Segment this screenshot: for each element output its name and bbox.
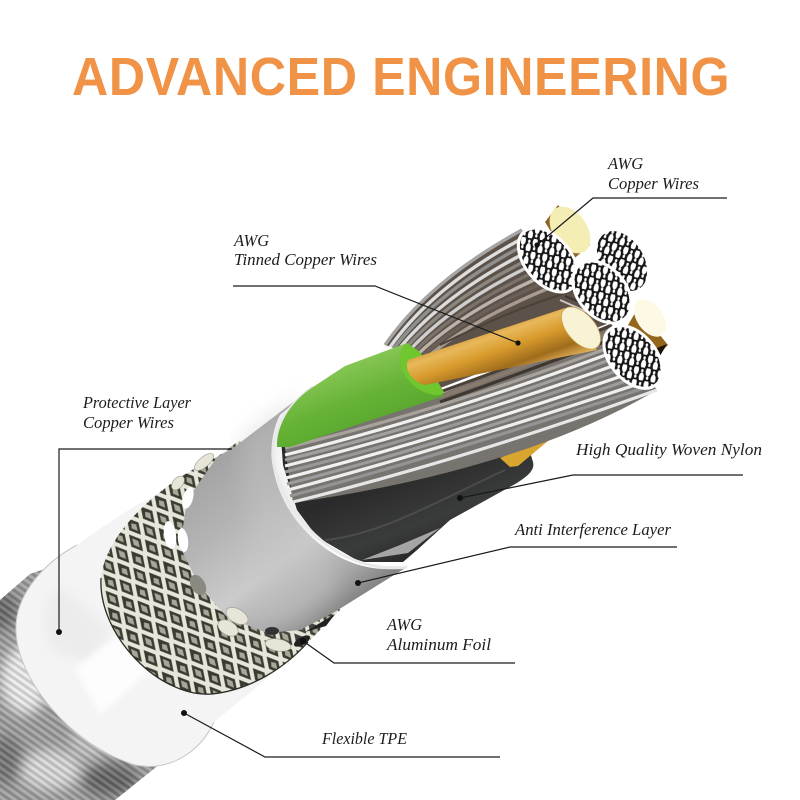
green insulation [277,343,444,447]
callout: flexible TPE [181,710,500,757]
strand end caps [507,217,674,399]
silver anti-interference tube [180,387,407,633]
upper strand bundle [385,230,618,392]
gold wire behind dark layer [500,437,548,467]
callout: AWG copper wires: Copper Wires [608,174,699,193]
callout: AWG copper wires: AWG [607,154,643,173]
flexible TPE collar [16,490,290,766]
callout: AWG tinned copper wires: Tinned Copper Wires [234,250,377,269]
callout: anti interference layer: Anti Interference Layer [514,520,672,539]
callout: AWG tinned copper wires [233,231,521,346]
callout: high quality woven nylon: High Quality Woven Nylon [575,440,762,459]
back copper wires [541,199,673,358]
dark shielding layer [280,425,533,562]
callout: AWG aluminum foil: AWG [386,615,422,634]
braided nylon sheath [0,570,158,800]
callout: AWG copper wires [534,154,727,248]
callout: protective layer copper wires: Copper Wires [83,413,174,432]
illustration: cable cross-section [0,199,674,800]
callout: flexible TPE: Flexible TPE [321,729,407,748]
callout: AWG tinned copper wires: AWG [233,231,269,250]
title: ADVANCED ENGINEERING [72,47,730,107]
callout: protective layer copper wires: Protective Layer [82,393,192,412]
tube rim [273,387,407,568]
tinned copper conductor [407,308,597,385]
callout: AWG aluminum foil [300,615,515,663]
callout: protective layer copper wires [56,393,232,635]
lower strand bundle [285,325,657,503]
callout: AWG aluminum foil: Aluminum Foil [386,635,491,654]
woven copper mesh [101,440,340,694]
callout: high quality woven nylon [457,440,762,501]
mesh wire ends [162,450,312,653]
callout: anti interference layer [355,520,677,586]
